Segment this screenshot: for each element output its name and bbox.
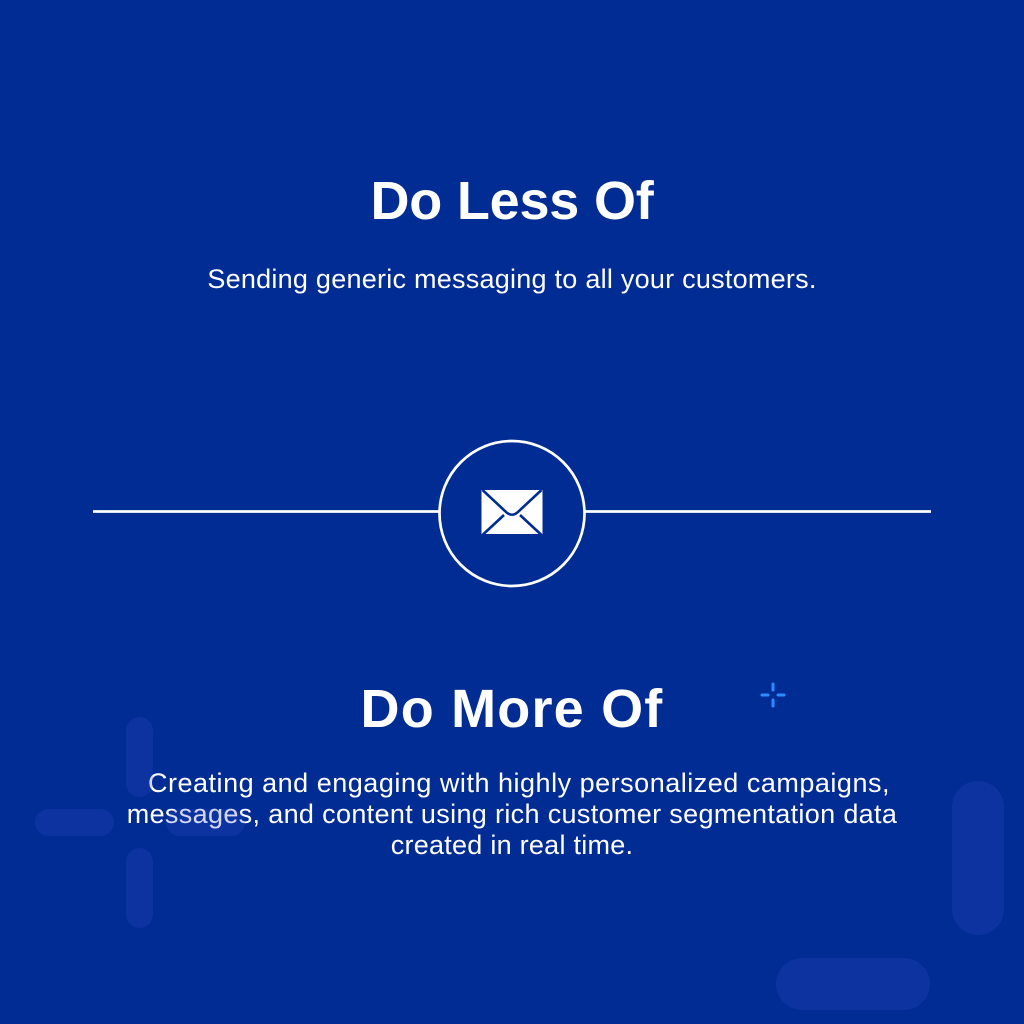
decorative pill: large right vertical — [952, 781, 1004, 935]
decorative pill: bottom of cross — [126, 848, 153, 928]
heading: do more of: Do More Of — [360, 679, 664, 739]
text: do more description: created in real time. — [391, 830, 633, 860]
text: do more description: messages, and content using rich customer segmentation data — [127, 799, 897, 829]
text: do more description — [127, 768, 897, 860]
text: do more description: Creating and engaging with highly personalized campaigns, — [148, 768, 890, 798]
decorative pill: large bottom horizontal — [776, 958, 930, 1010]
decorative pill: top of cross — [126, 717, 153, 797]
decorative pill: right of cross — [166, 809, 245, 836]
decorative pill: left of cross — [35, 809, 114, 836]
text: do less description: Sending generic messaging to all your customers. — [207, 264, 817, 294]
heading: do less of: Do Less Of — [370, 171, 654, 231]
